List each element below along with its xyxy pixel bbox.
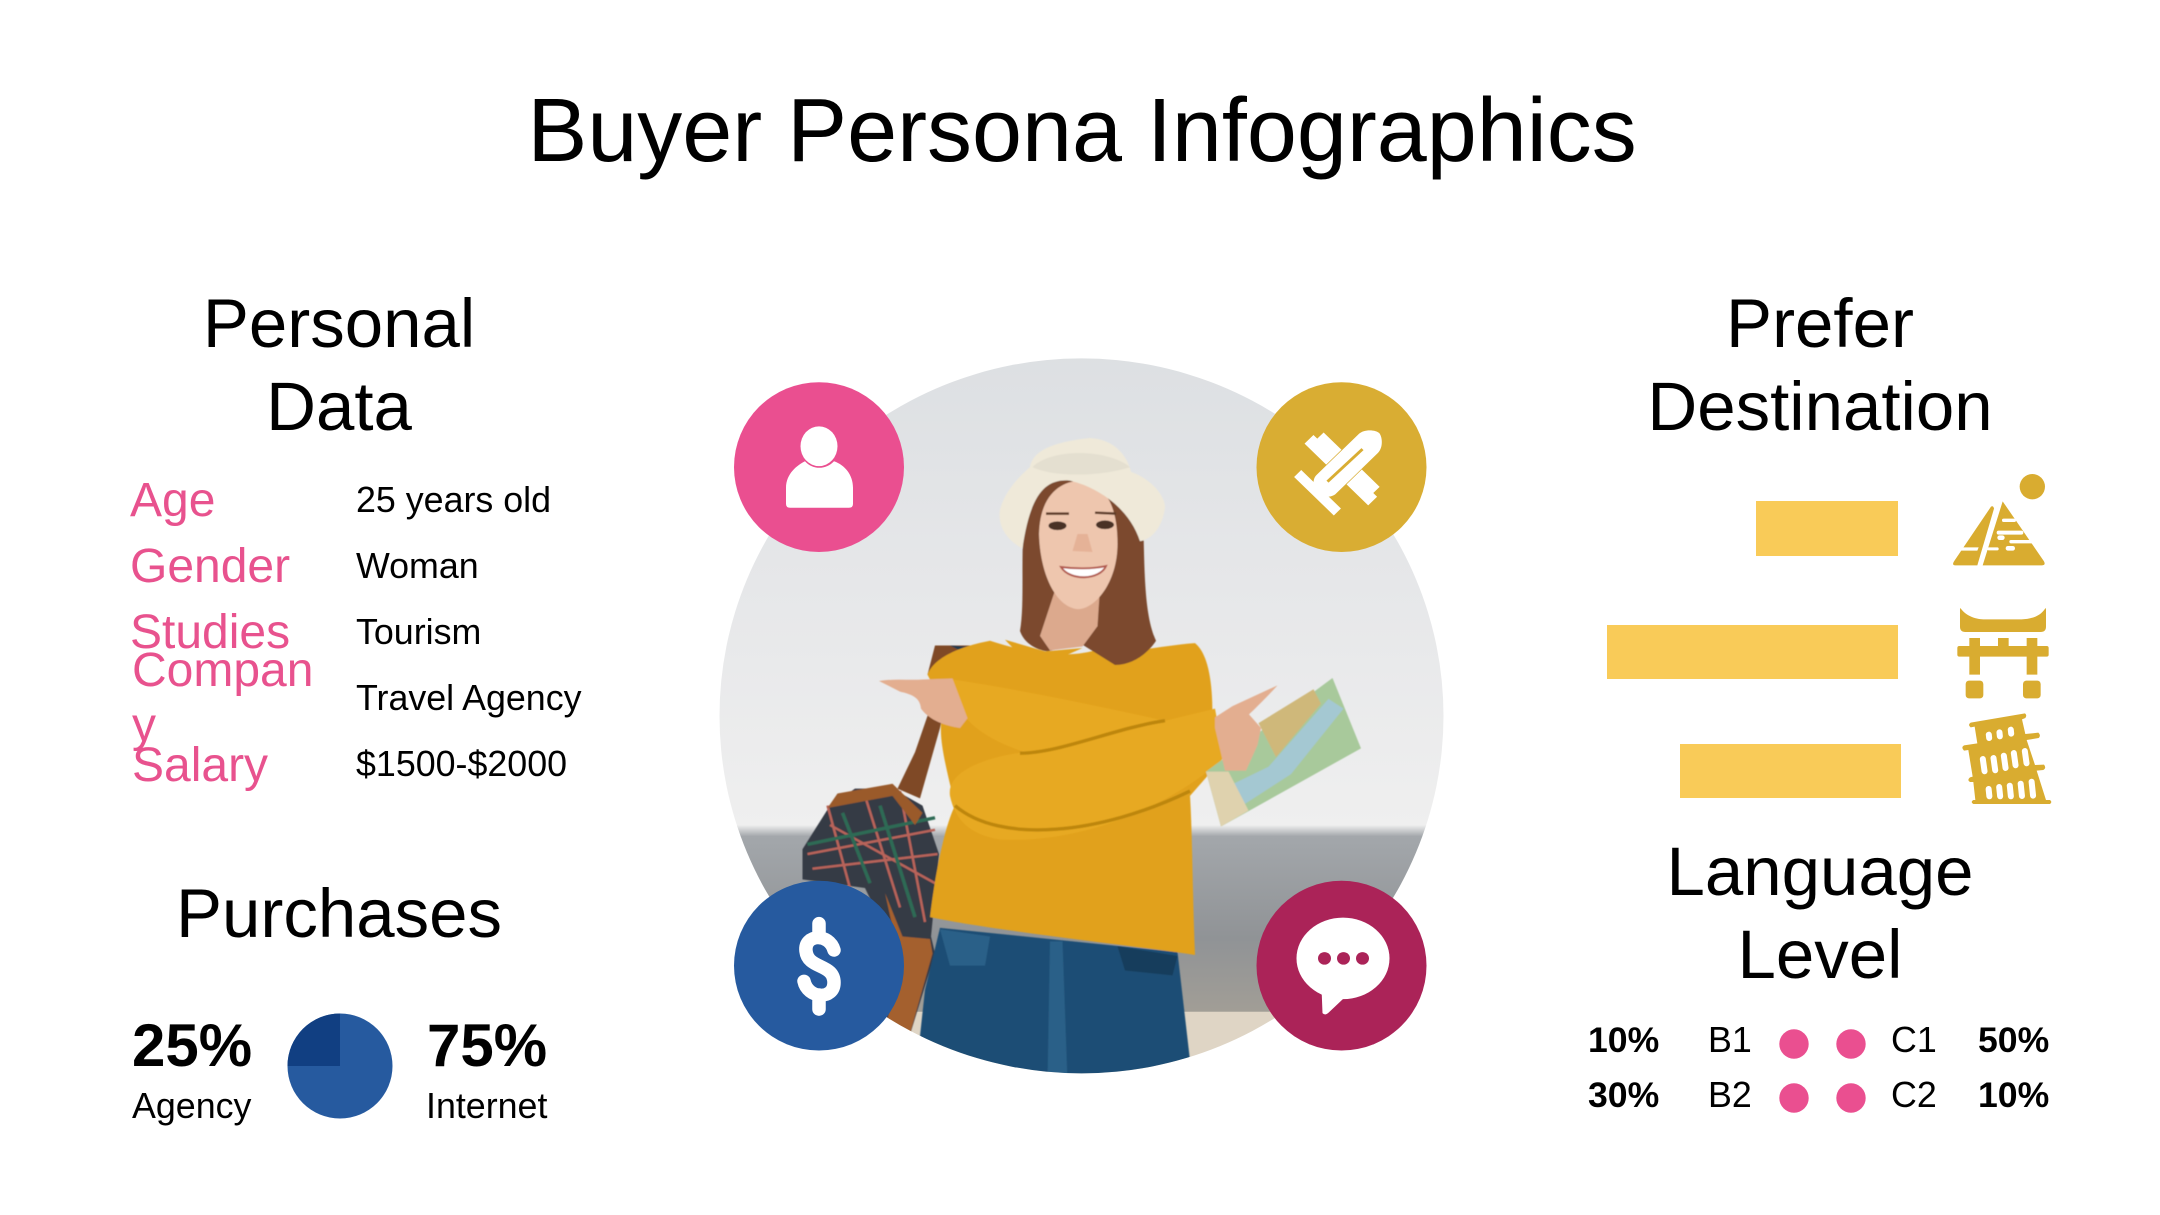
field labels: y <box>132 699 156 752</box>
neck and hair <box>1020 476 1156 665</box>
field values: $1500-$2000 <box>356 744 567 784</box>
field labels: Studies <box>130 606 290 659</box>
stat: internet 75%: Internet <box>426 1086 547 1126</box>
language labels right: C1 <box>1891 1020 1937 1060</box>
stat: agency 25%: Agency <box>132 1086 252 1126</box>
pie chart: 25 / 75 <box>288 1014 392 1118</box>
sweater <box>928 641 1224 955</box>
stat: agency 25%: 25% <box>132 1012 252 1079</box>
stat: internet 75%: 75% <box>427 1012 547 1079</box>
heading: purchases: Purchases <box>176 875 502 952</box>
language labels left <box>1708 1020 1752 1115</box>
face <box>1039 481 1118 609</box>
icon: torii gate <box>1957 608 2049 698</box>
language percentages left: 30% <box>1588 1075 1659 1115</box>
jeans <box>915 928 1192 1082</box>
language percentages right <box>1978 1020 2049 1115</box>
photo: traveller woman pointing, in circle <box>720 358 1444 1074</box>
field labels <box>130 474 313 792</box>
map <box>1206 678 1361 826</box>
strap and backpack <box>802 789 939 1035</box>
title: Buyer Persona Infographics <box>527 81 1637 181</box>
language dots <box>1779 1029 1866 1113</box>
panel: purchases <box>132 875 547 1126</box>
field values: Travel Agency <box>356 678 582 718</box>
heading: language level: Level <box>1738 916 1902 993</box>
stat: agency 25% <box>132 1012 252 1126</box>
language labels left: B1 <box>1708 1020 1752 1060</box>
field values <box>356 480 582 784</box>
field labels: Age <box>130 474 215 527</box>
field values: 25 years old <box>356 480 551 520</box>
icon: speech bubble on maroon circle <box>1256 881 1426 1051</box>
heading: prefer destination: Prefer <box>1726 285 1914 362</box>
language percentages right: 50% <box>1978 1020 2049 1060</box>
language labels right: C2 <box>1891 1075 1937 1115</box>
field labels: Compan <box>132 644 313 697</box>
heading: prefer destination: Destination <box>1647 368 1993 445</box>
panel: language level <box>1588 833 2049 1115</box>
field labels: Salary <box>132 739 268 792</box>
field values: Woman <box>356 546 479 586</box>
field labels: Gender <box>130 540 290 593</box>
heading: language level: Language <box>1666 833 1974 910</box>
panel: personal data <box>130 285 582 792</box>
hands <box>879 679 968 728</box>
field values: Tourism <box>356 612 481 652</box>
panel: prefer destination <box>1607 285 2051 804</box>
icon: dollar on blue circle <box>734 881 904 1051</box>
language percentages left <box>1588 1020 1659 1115</box>
bar chart: destinations <box>1607 501 1901 798</box>
icon: plane on gold circle <box>1256 382 1426 552</box>
language labels left: B2 <box>1708 1075 1752 1115</box>
heading: personal data: Personal <box>203 285 475 362</box>
language percentages left: 10% <box>1588 1020 1659 1060</box>
heading: personal data: Data <box>266 368 412 445</box>
stat: internet 75% <box>426 1012 547 1126</box>
hat <box>1000 438 1165 549</box>
language labels right <box>1891 1020 1937 1115</box>
language percentages right: 10% <box>1978 1075 2049 1115</box>
icon: pyramid <box>1953 474 2045 565</box>
icon: person on pink circle <box>734 382 904 552</box>
icon: leaning tower <box>1962 713 2051 804</box>
